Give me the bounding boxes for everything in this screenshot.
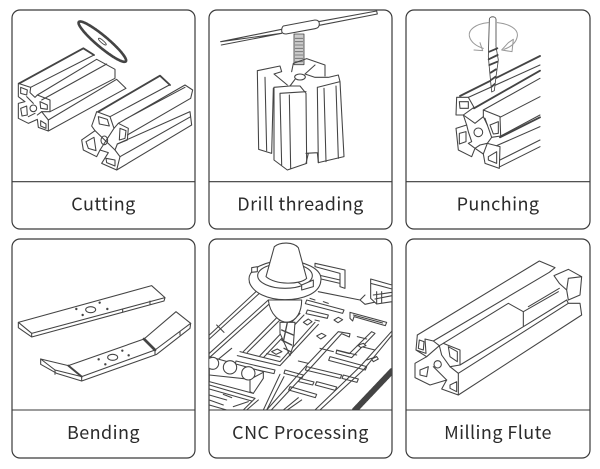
icon: spindle collar xyxy=(249,261,321,300)
panel: bending xyxy=(12,239,195,458)
panel: punching xyxy=(406,10,590,229)
icon: milled profile xyxy=(415,261,582,395)
label: Cutting: Cutting xyxy=(71,190,136,216)
icon: left profile xyxy=(18,48,126,131)
raised block with holes xyxy=(207,357,263,393)
icon: tap wrench bar xyxy=(221,11,377,45)
illustration: flat and bent bars xyxy=(18,286,191,381)
label: Drill threading: Drill threading xyxy=(237,190,364,216)
icon: saw blade xyxy=(75,18,129,66)
icon: right profile xyxy=(82,76,193,170)
illustration: saw blade cutting two aluminium profiles xyxy=(18,18,193,170)
icon: spindle cone xyxy=(266,243,307,283)
icon: bent bar xyxy=(41,312,191,381)
plate rails xyxy=(209,291,392,410)
icon: cutting tool xyxy=(268,300,302,356)
upright brackets xyxy=(315,263,392,304)
illustration: drill bit punching a profile xyxy=(456,17,540,168)
panel: cutting xyxy=(12,10,195,229)
illustration: CNC spindle machining a plate xyxy=(207,243,392,410)
icon: flat bar xyxy=(18,286,165,337)
label: Punching: Punching xyxy=(457,190,539,216)
label: Bending: Bending xyxy=(67,419,140,445)
label: Milling Flute: Milling Flute xyxy=(444,419,552,445)
panel: milling flute xyxy=(406,239,590,458)
icon: aluminium profile xyxy=(456,56,540,168)
icon: thread shank xyxy=(294,34,304,65)
illustration: profile with milled flute xyxy=(415,261,582,395)
icon: end stub xyxy=(554,269,582,300)
panel: drill threading xyxy=(209,10,392,229)
illustration: tap wrench above vertical profile xyxy=(221,11,377,170)
panel: cnc processing xyxy=(207,239,392,458)
icon: vertical profile xyxy=(257,59,344,170)
icon: drill bit xyxy=(488,17,498,92)
hatched rail xyxy=(355,371,392,410)
icon: rotation arrow xyxy=(469,23,517,52)
label: CNC Processing: CNC Processing xyxy=(232,419,369,445)
small square pads xyxy=(272,317,378,362)
